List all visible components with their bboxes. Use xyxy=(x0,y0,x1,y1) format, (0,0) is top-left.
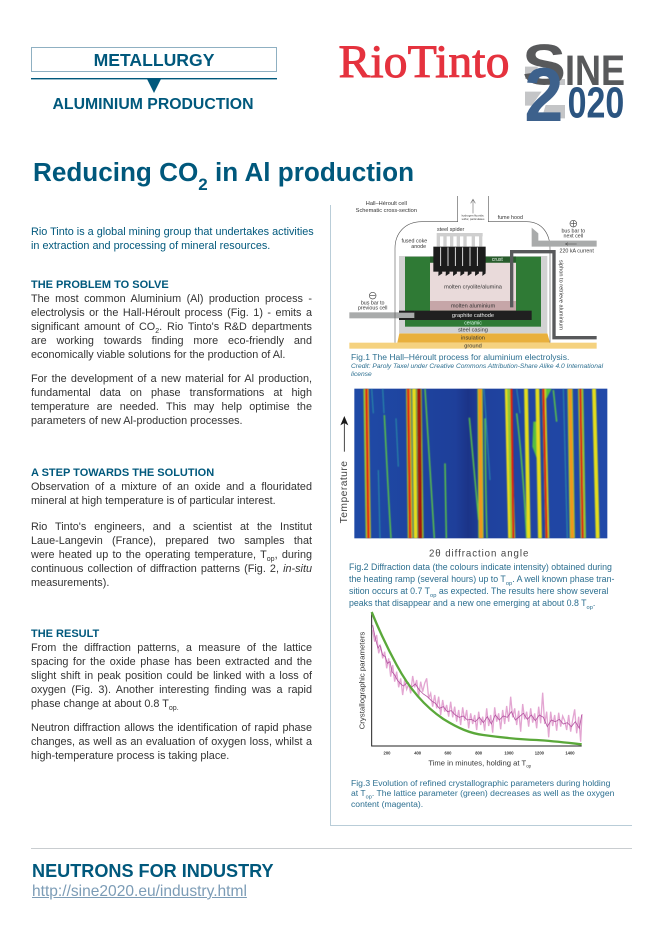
figure 2: diffraction heat map: 2θ diffraction angle xyxy=(429,549,528,560)
text: neutron diffraction: changes, as well as an evaluation of oxygen loss, whilst a xyxy=(31,736,312,748)
heading: the result: THE RESULT xyxy=(31,628,99,640)
metallurgy label box: METALLURGY xyxy=(94,50,214,70)
divider with pointer xyxy=(31,78,277,93)
figure 3: crystallographic parameters chart xyxy=(357,612,583,769)
text: observation xyxy=(31,481,312,507)
figure 1 credit xyxy=(351,362,604,378)
figure 3 caption: content (magenta). xyxy=(351,799,423,809)
text: material development xyxy=(31,373,312,427)
text: observation: mineral at high temperature is of particular interest. xyxy=(31,495,276,507)
figure 1: Hall-Heroult cell diagram: fused coke xyxy=(401,238,427,244)
text: result: spacing for the oxide phase has been extracted and the xyxy=(31,656,312,668)
text: result: phase change at about 0.8 Top. xyxy=(31,698,179,712)
figure 2 caption: the heating ramp (several hours) up to Top. A well known phase tran- xyxy=(349,574,614,587)
figure 1: Hall-Heroult cell diagram: anode xyxy=(411,244,426,250)
text: the problem: significant amount of CO2. Rio Tinto's R&D departments xyxy=(31,321,312,335)
intro text xyxy=(31,226,314,252)
text: engineers: measurements). xyxy=(31,577,109,589)
logo: SINE2020: 020 xyxy=(568,80,624,128)
figure 1: Hall-Heroult cell diagram: Schematic cross-section xyxy=(356,208,417,214)
figure 3: crystallographic parameters chart: 1400 xyxy=(565,750,575,755)
text: material development: temperature are needed. This may help optimise the xyxy=(31,401,312,413)
figure 3: crystallographic parameters chart: 400 xyxy=(414,750,422,755)
figure 3: crystallographic parameters chart: 200 xyxy=(384,750,391,755)
text: observation: Observation of a mixture of an oxide and a flouridated xyxy=(31,481,312,493)
text: engineers: Laue-Langevin (France), prepared two samples that xyxy=(31,535,312,547)
figure 3: crystallographic parameters chart: 800 xyxy=(475,750,483,755)
text: neutron diffraction: Neutron diffraction allows the identification of rapid phase xyxy=(31,722,312,734)
figure 1: Hall-Heroult cell diagram: molten cryolite/alumina xyxy=(444,285,503,291)
logo: SINE2020: S xyxy=(522,33,566,97)
figure 3: crystallographic parameters chart: Time in minutes, holding at T xyxy=(428,759,526,768)
metallurgy label box xyxy=(31,47,277,72)
logo: SINE2020 xyxy=(522,33,625,138)
figure 3 caption: at Top. The lattice parameter (green) decreases as well as the oxygen xyxy=(351,788,614,801)
footer link: http://sine2020.eu/industry.html xyxy=(32,883,247,900)
figure 1: Hall-Heroult cell diagram: steel casing xyxy=(458,328,488,334)
text: the problem xyxy=(31,293,312,361)
text: engineers: were heated up to the operating temperature, Top, during xyxy=(31,549,312,563)
figure 2 caption: sition occurs at 0.7 Top as expected. The results here show several xyxy=(349,586,608,599)
footer heading: NEUTRONS FOR INDUSTRY xyxy=(32,861,274,881)
figure 1: Hall-Heroult cell diagram: ceramic xyxy=(464,321,482,327)
text: engineers: continuous collection of diffraction patterns (Fig. 2, in-situ xyxy=(31,563,312,575)
text: the problem: The most common Aluminium (Al) production process - xyxy=(31,293,312,305)
figure 1: Hall-Heroult cell diagram: fume hood xyxy=(498,215,523,221)
heading: the problem to solve: THE PROBLEM TO SOLVE xyxy=(31,279,169,291)
figure 1: Hall-Heroult cell diagram: molten aluminium xyxy=(451,303,495,309)
figure 1: Hall-Heroult cell diagram: 220 kA current xyxy=(559,249,594,255)
figure 3: crystallographic parameters chart: 600 xyxy=(445,750,452,755)
text: result: From the diffraction patterns, a measure of the lattice xyxy=(31,642,312,654)
text: the problem: are working towards finding more eco-friendly and xyxy=(31,335,312,347)
figure 3 caption: Fig.3 Evolution of refined crystallographic parameters during holding xyxy=(351,778,610,788)
figure 1: Hall-Heroult cell diagram: Hall–Héroult cell xyxy=(366,201,407,207)
intro text: in extraction and processing of mineral resources. xyxy=(31,240,270,252)
text: material development: For the development of a new material for Al production, xyxy=(31,373,312,385)
figure 3: crystallographic parameters chart: op xyxy=(526,764,532,769)
text: result: slight shift in peak position could be linked with a loss of xyxy=(31,670,312,682)
figure 3: crystallographic parameters chart: 1000 xyxy=(504,750,514,755)
text: result: oxygen (Fig. 3). Another interesting finding was a rapid xyxy=(31,684,312,696)
figure 2: diffraction heat map: Temperature xyxy=(339,461,350,523)
figure 1 credit: license xyxy=(351,371,372,378)
figure 2: diffraction heat map xyxy=(339,388,608,560)
figure 1: Hall-Heroult cell diagram: bus bar to xyxy=(561,229,585,235)
figure 1: Hall-Heroult cell diagram: ground xyxy=(464,343,482,349)
figure 1 credit: Credit: Paroly Taxel under Creative Commons Attribution-Share Alike 4.0 International xyxy=(351,362,603,370)
figure 1: Hall-Heroult cell diagram: crust xyxy=(492,257,503,263)
title: Reducing CO2 in Al production xyxy=(33,157,414,194)
figure 1: Hall-Heroult cell diagram: graphite cathode xyxy=(452,313,494,319)
sub-category heading: ALUMINIUM PRODUCTION xyxy=(53,96,253,113)
figure 2 caption: Fig.2 Diffraction data (the colours indicate intensity) obtained during xyxy=(349,562,612,572)
figure 1: Hall-Heroult cell diagram: sulfur, particulates xyxy=(462,217,485,221)
figure 1: Hall-Heroult cell diagram xyxy=(349,196,597,349)
figure 1: Hall-Heroult cell diagram: steel spider xyxy=(437,227,465,233)
logo: SINE2020: 2 xyxy=(524,53,563,138)
figure 3 caption xyxy=(351,778,614,809)
logo: SINE2020: INE xyxy=(565,47,625,95)
figure 1: Hall-Heroult cell diagram: siphon to retrieve aluminium xyxy=(557,260,563,330)
text: the problem: electrolysis or the Hall-Héroult process (Fig. 1) - emits a xyxy=(31,307,312,319)
figure 1: Hall-Heroult cell diagram: next cell xyxy=(564,234,583,240)
figure 1 caption: Fig.1 The Hall–Héroult process for aluminium electrolysis. xyxy=(351,352,569,362)
text: neutron diffraction xyxy=(31,722,312,762)
text: material development: fundamental data on phase transformations at high xyxy=(31,387,312,399)
figure 2 caption xyxy=(349,562,614,611)
text: material development: parameters of new Al-production processes. xyxy=(31,415,243,427)
heading: a step towards the solution: A STEP TOWARDS THE SOLUTION xyxy=(31,467,214,479)
figure 1: Hall-Heroult cell diagram: insulation xyxy=(461,336,485,342)
intro text: Rio Tinto is a global mining group that undertakes activities xyxy=(31,226,314,238)
figure 1: Hall-Heroult cell diagram: hydrogen fluoride, xyxy=(462,214,485,218)
text: result xyxy=(31,642,312,712)
text: the problem: economically viable solutions for the production of Al. xyxy=(31,349,285,361)
figure 1: Hall-Heroult cell diagram: previous cell xyxy=(358,305,387,311)
figure 3: crystallographic parameters chart: 1200 xyxy=(535,750,545,755)
text: engineers: Rio Tinto's engineers, and a scientist at the Institut xyxy=(31,521,312,533)
text: engineers xyxy=(31,521,312,589)
figure 1: Hall-Heroult cell diagram: bus bar to xyxy=(361,300,385,306)
text: neutron diffraction: high-temperature process is taking place. xyxy=(31,750,229,762)
figure 3: crystallographic parameters chart: Crystallographic parameters xyxy=(357,632,366,729)
figure 2 caption: peaks that disappear and a new one emerging at about 0.8 Top. xyxy=(349,598,595,611)
logo: Rio Tinto: RioTinto xyxy=(338,36,509,88)
